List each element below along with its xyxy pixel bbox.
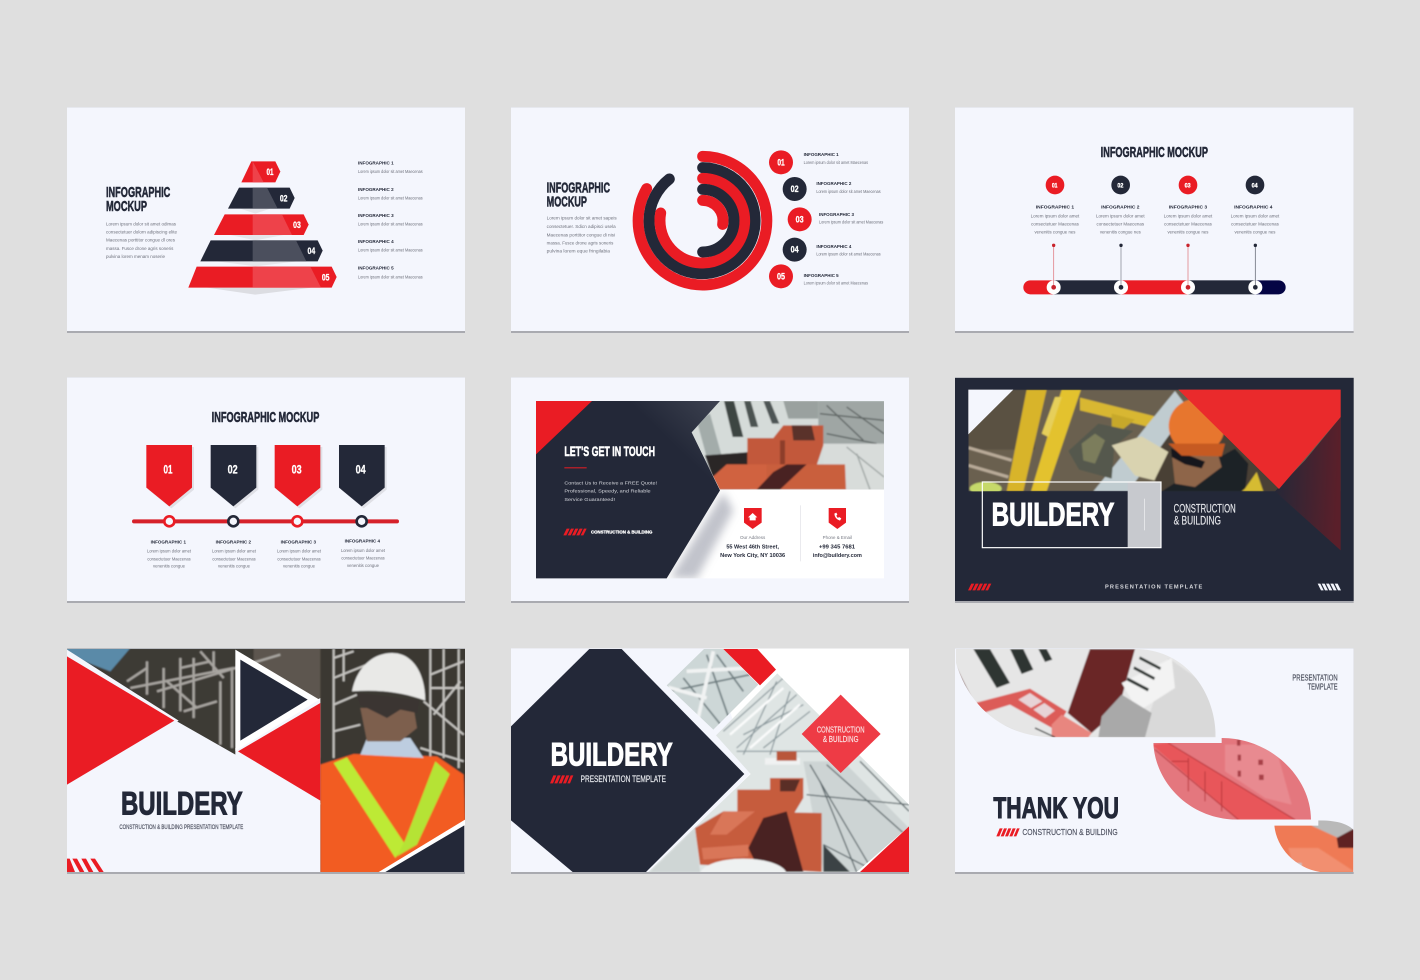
panel: dark cover slide — [955, 377, 1354, 603]
light left background — [511, 648, 750, 872]
pyramid layer 2 — [228, 188, 295, 209]
body text: Maecenas porttitor congue di nisi — [547, 232, 615, 237]
white backing of triangles — [67, 650, 320, 805]
photo: hall with sofas — [648, 674, 909, 872]
step 4 — [1231, 176, 1280, 235]
step 1: INFOGRAPHIC 1 — [1036, 204, 1074, 210]
item 5: INFOGRAPHIC 5 — [804, 273, 839, 279]
shield 01: 01 — [163, 463, 173, 477]
photo: steel roof top — [666, 649, 758, 730]
item 5: Lorem ipsum dolor sit amet Maecenas — [804, 281, 869, 286]
dark panel — [536, 401, 720, 578]
body text: pulvina lorem eque fringilabia — [547, 249, 610, 254]
title box — [982, 482, 1161, 548]
body text: Lorem ipsum dolor sit amet odimas — [106, 221, 177, 226]
shield 02: 02 — [228, 463, 238, 477]
address block: 55 West 46th Street, — [726, 544, 780, 550]
step 2: Lorem ipsum dolor amet — [1096, 214, 1145, 219]
step 2: consectetuer Maecenas — [1096, 222, 1145, 227]
caption 2 — [212, 539, 257, 569]
caption 2: consectetuer Maecenas — [212, 556, 256, 561]
caption 3: Lorem ipsum dolor amet — [277, 549, 322, 554]
photo leaf 3 — [1274, 820, 1354, 872]
item 2: Lorem ipsum dolor sit amet Maecenas — [816, 189, 881, 194]
item 2: 02 — [791, 184, 799, 194]
step 2: INFOGRAPHIC 2 — [1101, 204, 1140, 210]
pyramid layer 3 — [214, 214, 309, 235]
address block: Our Address — [740, 535, 765, 540]
step 4: venenitis congue nes — [1234, 230, 1276, 235]
shield 04 — [339, 445, 387, 508]
panel: triangle cover slide — [67, 648, 467, 875]
body text — [106, 221, 177, 259]
red corner block — [860, 826, 909, 872]
caption 2: venenitis congue — [218, 564, 250, 569]
body text: Lorem ipsum dolor sit amet sapeis — [547, 216, 617, 221]
navy hexagon — [511, 649, 744, 872]
item 3: INFOGRAPHIC 3 — [819, 212, 854, 218]
item 3 — [788, 207, 884, 231]
heading: LET'S GET IN TOUCH — [564, 443, 655, 459]
icon: white stripes — [1318, 584, 1341, 590]
legend labels: INFOGRAPHIC 4 — [358, 239, 394, 245]
step 3: Lorem ipsum dolor amet — [1164, 214, 1213, 219]
caption 2: Lorem ipsum dolor amet — [212, 549, 257, 554]
heading: infographic mockup: INFOGRAPHIC — [106, 185, 170, 201]
heading: infographic mockup: INFOGRAPHIC — [547, 181, 610, 197]
navy triangle with white border — [235, 650, 319, 751]
subtitle — [1174, 502, 1236, 527]
body text: pulvina lorem menam noserie — [106, 254, 165, 259]
icon: home shield — [744, 508, 762, 529]
timeline bar with markers — [1023, 244, 1286, 294]
legend labels: Lorem ipsum dolor sit amet Maecenas — [358, 248, 423, 253]
address block — [720, 535, 785, 559]
brand tagline: CONSTRUCTION & BUILDING — [591, 530, 652, 536]
step 3 — [1164, 176, 1213, 235]
shield 03: 03 — [292, 463, 302, 477]
item 1: 01 — [777, 158, 785, 168]
timeline line with nodes — [132, 516, 399, 526]
pyramid layer 3: 03 — [293, 220, 301, 230]
body text: massa. Fusce drone agris soneris — [106, 246, 174, 251]
faded red triangle — [1275, 417, 1341, 550]
caption 4: venenitis congue — [347, 563, 379, 568]
legend labels — [358, 160, 423, 279]
subtitle: CONSTRUCTION & BUILDING PRESENTATION TEMPLATE — [119, 824, 243, 831]
body text — [547, 216, 617, 254]
footer label: PRESENTATION TEMPLATE — [1105, 585, 1203, 591]
step 1: venenitis congue nes — [1034, 230, 1076, 235]
icon: stripes — [550, 775, 573, 783]
red right triangle — [238, 703, 320, 801]
title: BUILDERY — [551, 736, 673, 773]
step 3: 03 — [1185, 182, 1191, 189]
phone and email block: info@buildery.com — [813, 553, 862, 559]
pyramid layer 5: 05 — [322, 272, 329, 282]
icon: red stripes — [968, 584, 991, 590]
red triangle overlay — [1178, 390, 1341, 489]
chart: layered pyramid — [188, 161, 337, 295]
item 3: 03 — [796, 214, 804, 224]
step 1: Lorem ipsum dolor amet — [1031, 214, 1080, 219]
caption 1: Lorem ipsum dolor amet — [147, 549, 192, 554]
legend labels: Lorem ipsum dolor sit amet Maecenas — [358, 196, 423, 201]
body text: Service Guaranteed! — [564, 497, 615, 503]
accent line — [564, 467, 587, 468]
item 2: INFOGRAPHIC 2 — [816, 181, 852, 187]
step 3: consectetuer Maecenas — [1164, 222, 1212, 227]
panel: diamond cover slide — [511, 648, 913, 891]
caption 1 — [147, 539, 192, 569]
step 4: Lorem ipsum dolor amet — [1231, 214, 1280, 219]
heading: INFOGRAPHIC MOCKUP — [1101, 145, 1208, 161]
photo leaf 1 — [955, 648, 1222, 738]
legend labels: Lorem ipsum dolor sit amet Maecenas — [358, 274, 423, 279]
top right label: TEMPLATE — [1308, 681, 1338, 691]
caption 4: INFOGRAPHIC 4 — [345, 539, 380, 545]
caption 4 — [341, 539, 386, 568]
panel: horizontal timeline slide — [955, 107, 1354, 333]
soft shadow beside dark panel — [670, 492, 733, 578]
red left triangle — [67, 656, 174, 785]
red corner triangle — [536, 401, 592, 454]
item 3: Lorem ipsum dolor sit amet Maecenas — [819, 220, 884, 225]
navy corner triangle — [379, 820, 465, 872]
step 2 — [1096, 176, 1145, 235]
step 2: venenitis congue nes — [1100, 230, 1141, 235]
heading: infographic mockup — [547, 181, 610, 210]
body text: massa. Fusce drone agris soneris — [547, 240, 614, 245]
legend labels: INFOGRAPHIC 3 — [358, 213, 394, 219]
step 1 — [1031, 176, 1080, 235]
legend labels: INFOGRAPHIC 1 — [358, 160, 394, 166]
step 3: venenitis congue nes — [1167, 230, 1209, 235]
legend labels: Lorem ipsum dolor sit amet Maecenas — [358, 169, 423, 174]
body text: consectetuer. Sdicn adipisci usela — [547, 224, 616, 229]
item 1 — [769, 150, 869, 174]
caption 4: consectetuer Maecenas — [341, 556, 385, 561]
caption 2: INFOGRAPHIC 2 — [216, 539, 251, 545]
phone and email block: Phone & Email — [823, 535, 852, 540]
caption 3: consectetuer Maecenas — [277, 556, 321, 561]
pyramid layer 1 — [241, 161, 280, 182]
item 1: INFOGRAPHIC 1 — [804, 152, 839, 158]
photo: sofas in hall — [692, 401, 884, 490]
caption 3: INFOGRAPHIC 3 — [281, 539, 316, 545]
title box: BUILDERY — [992, 495, 1114, 532]
red diamond — [802, 695, 881, 773]
heading: infographic mockup: MOCKUP — [547, 194, 587, 210]
shield 04: 04 — [356, 463, 366, 477]
diamond label — [817, 725, 864, 744]
pyramid layer 5 — [188, 267, 337, 288]
step 4: INFOGRAPHIC 4 — [1234, 204, 1273, 210]
body text — [564, 480, 657, 503]
photo: worker with helmet — [968, 390, 1341, 495]
photo: scaffolding and worker — [67, 648, 467, 875]
item 4: Lorem ipsum dolor sit amet Maecenas — [816, 252, 881, 257]
body text: Maecenas porttitor congue dl ores — [106, 238, 176, 243]
icon: corner stripes — [67, 859, 104, 872]
heading: INFOGRAPHIC MOCKUP — [212, 410, 320, 426]
item 2 — [783, 177, 881, 201]
heading: infographic mockup — [106, 185, 170, 215]
step 4: consectetuer Maecenas — [1231, 222, 1279, 227]
subtitle: & BUILDING — [1174, 514, 1221, 527]
chart: concentric arcs — [638, 156, 767, 285]
title: BUILDERY — [121, 785, 243, 822]
top right label: PRESENTATION — [1292, 672, 1338, 682]
subtitle: CONSTRUCTION & BUILDING — [1022, 827, 1118, 837]
caption 3 — [277, 539, 322, 569]
numbered list — [769, 150, 884, 288]
step 3: INFOGRAPHIC 3 — [1169, 204, 1207, 210]
subtitle: PRESENTATION TEMPLATE — [581, 774, 666, 784]
pyramid layer 4 — [200, 240, 323, 261]
step 4: 04 — [1252, 182, 1258, 189]
item 5 — [769, 264, 869, 288]
step 2: 02 — [1117, 182, 1124, 189]
top right label — [1292, 672, 1338, 691]
subtitle: CONSTRUCTION — [1174, 502, 1236, 515]
red top block — [723, 649, 776, 685]
icon: phone shield — [829, 508, 846, 529]
divider — [799, 505, 802, 561]
panel: pyramid infographic slide — [67, 107, 465, 333]
panel: thank you slide — [955, 648, 1355, 876]
body text: Professional, Speedy, and Reliable — [564, 489, 651, 495]
caption 1: venenitis congue — [153, 564, 185, 569]
item 5: 05 — [777, 271, 785, 281]
pyramid layer 1: 01 — [266, 167, 273, 177]
pyramid layer 4: 04 — [307, 246, 315, 256]
phone and email block — [813, 535, 862, 559]
body text: Contact Us to Receive a FREE Quote! — [564, 480, 657, 486]
legend labels: Lorem ipsum dolor sit amet Maecenas — [358, 222, 423, 227]
item 4 — [783, 238, 881, 262]
item 4: INFOGRAPHIC 4 — [816, 244, 852, 250]
address block: New York City, NY 10036 — [720, 553, 785, 559]
panel: concentric arcs infographic slide — [511, 107, 909, 333]
diamond label: CONSTRUCTION — [817, 725, 864, 735]
legend labels: INFOGRAPHIC 5 — [358, 266, 394, 272]
panel: shield timeline slide — [67, 377, 465, 603]
shield 03 — [275, 445, 322, 508]
caption 3: venenitis congue — [283, 564, 315, 569]
step 1: 01 — [1052, 182, 1058, 189]
title: THANK YOU — [993, 792, 1119, 825]
item 1: Lorem ipsum dolor sit amet Maecenas — [804, 160, 869, 165]
phone and email block: +99 345 7681 — [819, 544, 855, 550]
step 1: consectetuer Maecenas — [1031, 222, 1079, 227]
shield 02 — [211, 445, 258, 508]
caption 4: Lorem ipsum dolor amet — [341, 548, 386, 553]
legend labels: INFOGRAPHIC 2 — [358, 187, 394, 193]
caption 1: INFOGRAPHIC 1 — [151, 539, 186, 545]
body text: consectetuer dolorn adipiscing elite — [106, 230, 177, 235]
item 4: 04 — [791, 245, 799, 255]
white contact card — [536, 401, 884, 578]
caption 1: consectetuer Maecenas — [147, 556, 191, 561]
icon: stripes — [996, 828, 1020, 836]
shield 01 — [146, 445, 194, 508]
diamond label: & BUILDING — [823, 734, 858, 744]
white corner triangle — [968, 390, 1013, 434]
pyramid layer 2: 02 — [280, 193, 287, 203]
heading: infographic mockup: MOCKUP — [106, 199, 147, 215]
light panel — [67, 721, 320, 872]
icon: stripes — [563, 529, 587, 535]
photo leaf 2 — [1152, 736, 1315, 821]
panel: contact slide — [511, 377, 909, 603]
